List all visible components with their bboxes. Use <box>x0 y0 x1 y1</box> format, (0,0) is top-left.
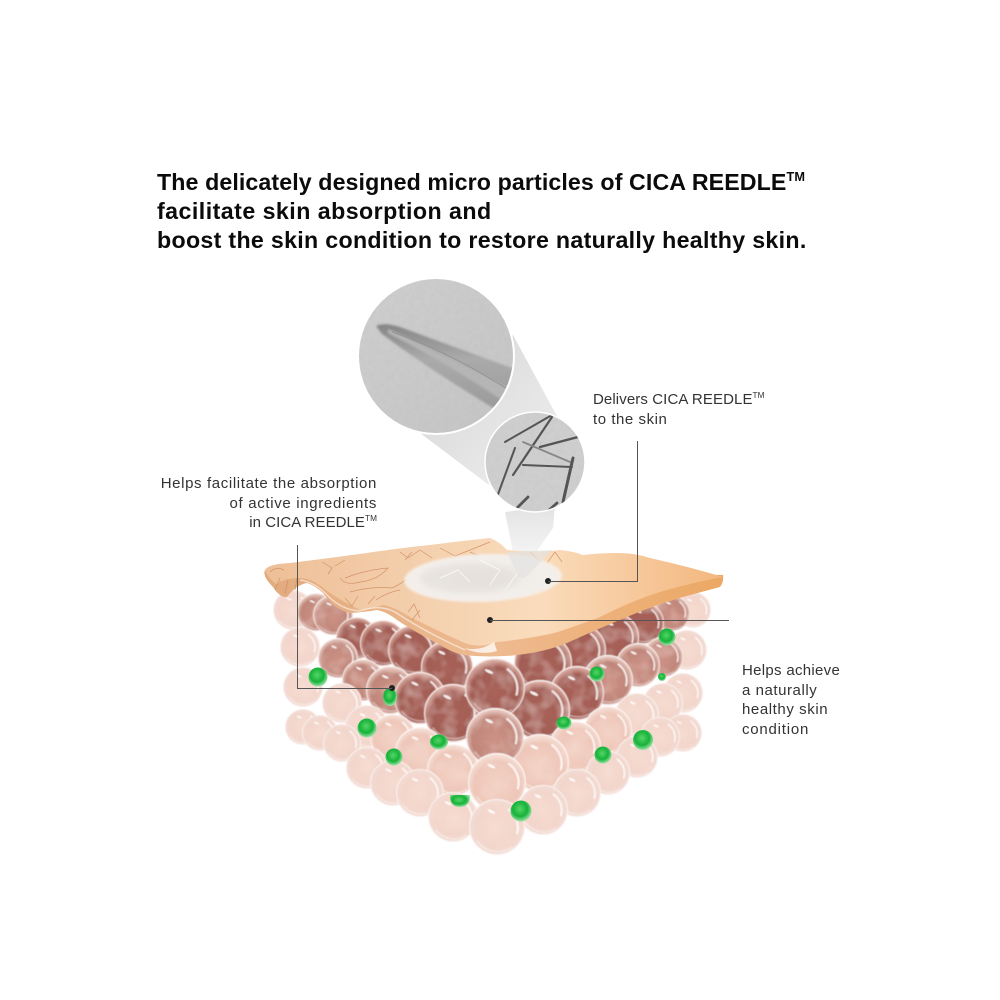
label: delivers to the skin <box>593 391 765 428</box>
label: facilitates absorption: in CICA REEDLETM <box>249 514 377 531</box>
bubble row 3: pale cells <box>283 667 703 796</box>
bubble row 2: mid-tone cells <box>280 627 707 742</box>
photo: CICA REEDLE needles <box>485 412 585 512</box>
callout line: healthy skin <box>487 617 729 623</box>
label: healthy skin condition <box>742 662 840 738</box>
callout line: absorption <box>298 545 395 691</box>
heading line 2: facilitate skin absorption and <box>157 198 492 224</box>
photo: needle close-up <box>358 278 520 434</box>
heading line 3: boost the skin condition to restore naturally healthy skin. <box>157 227 807 253</box>
label: facilitates absorption: of active ingredients <box>230 495 377 512</box>
heading line 1: The delicately designed micro particles of CICA REEDLETM <box>157 169 805 195</box>
edge highlight <box>300 580 465 650</box>
label: delivers to the skin: to the skin <box>593 411 667 428</box>
skin front edge <box>264 570 723 656</box>
center column of cells <box>465 658 526 855</box>
illustration: skin cell bubble cluster <box>273 590 711 855</box>
skin top surface <box>265 538 723 646</box>
label: facilitates absorption: Helps facilitate the absorption <box>161 475 377 492</box>
bubble row 4: bottom pale cells <box>285 709 702 842</box>
green active ingredient droplets <box>308 628 676 822</box>
translucent CICA REEDLE patch <box>403 550 563 605</box>
label: delivers to the skin: Delivers CICA REEDLETM <box>593 391 765 408</box>
label: healthy skin condition: a naturally <box>742 682 817 699</box>
cone: magnification beam between photos <box>420 335 558 485</box>
bubble row 1: deep red cells under the skin <box>273 590 711 693</box>
callout line: delivers <box>545 441 638 584</box>
label: healthy skin condition: Helps achieve <box>742 662 840 679</box>
label: healthy skin condition: healthy skin <box>742 701 828 718</box>
cone: beam from small photo to skin patch <box>505 505 555 578</box>
edge white notch <box>464 642 497 653</box>
label: facilitates absorption <box>161 475 377 531</box>
illustration: skin layer <box>264 538 723 656</box>
label: healthy skin condition: condition <box>742 721 809 738</box>
skin surface capillary texture <box>270 542 562 620</box>
